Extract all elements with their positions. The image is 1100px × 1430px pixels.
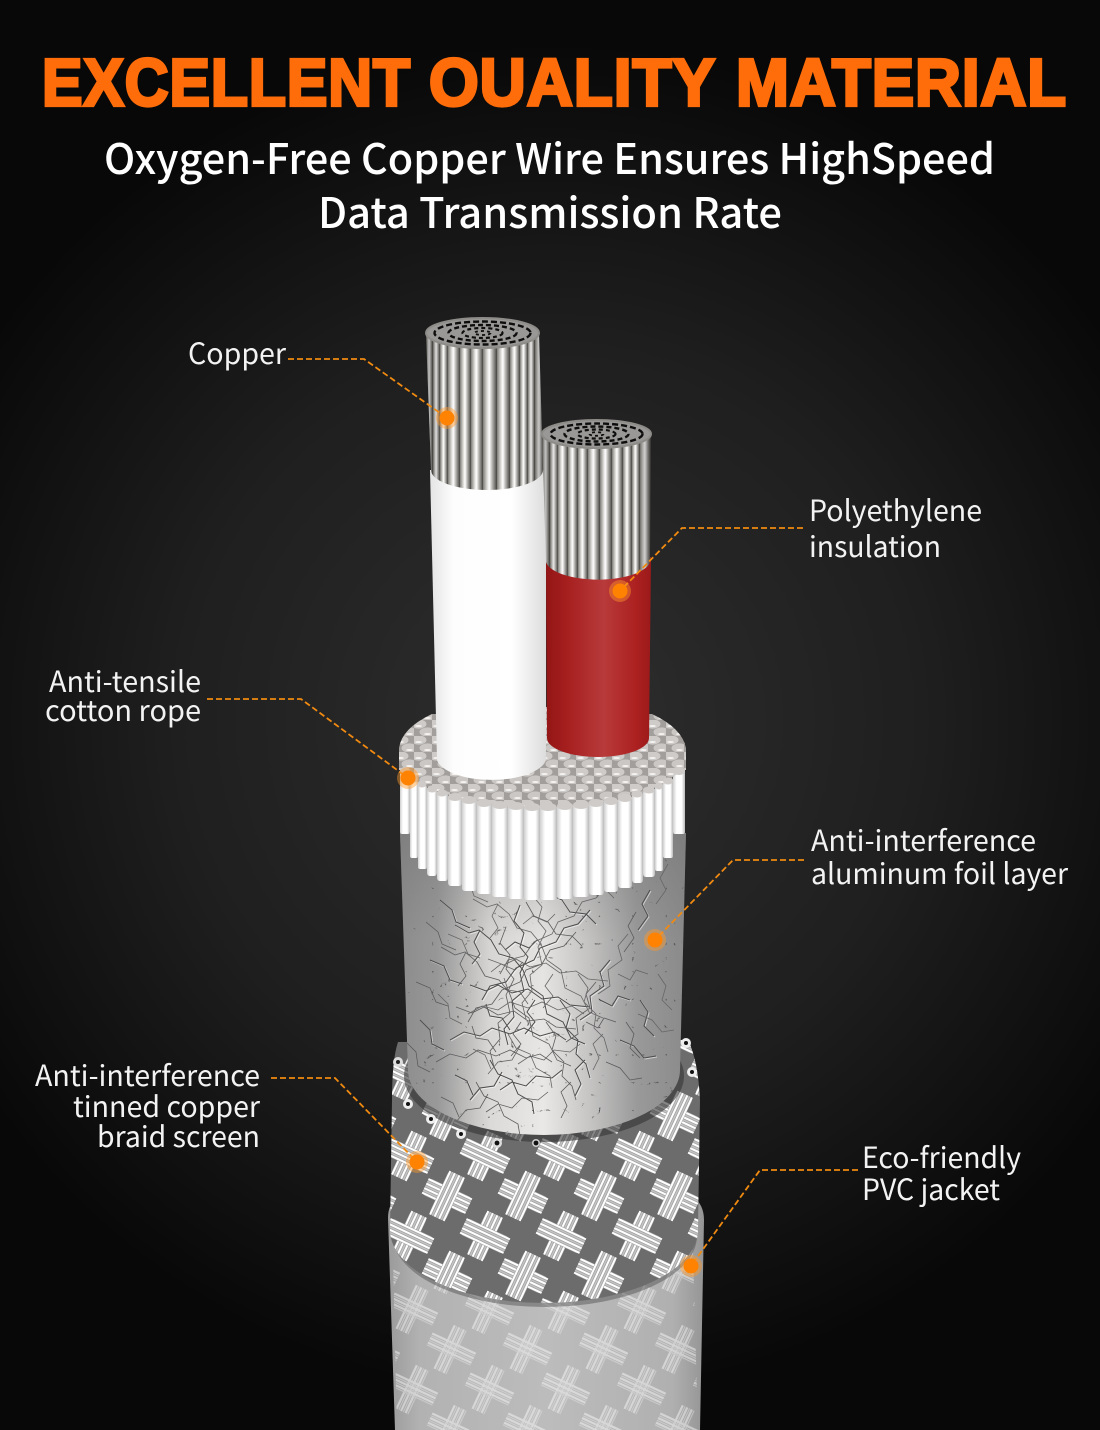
braid screen bbox=[390, 1010, 700, 1303]
cotton rope top surface bbox=[399, 707, 686, 811]
copper end face A bbox=[426, 318, 539, 348]
label: tinned copper braid screen: braid screen bbox=[97, 1114, 260, 1156]
label: aluminum foil layer: Anti-interference bbox=[811, 818, 1036, 860]
label: aluminum foil layer bbox=[644, 818, 1069, 951]
aluminum foil layer bbox=[396, 830, 690, 1140]
label: PVC jacket bbox=[680, 1135, 1021, 1277]
label: tinned copper braid screen: Anti-interference bbox=[35, 1053, 260, 1095]
label: anti-tensile cotton rope: Anti-tensile bbox=[49, 659, 201, 701]
subtitle bbox=[104, 126, 995, 241]
label: copper: Copper bbox=[188, 331, 287, 373]
label: polyethylene insulation: insulation bbox=[809, 524, 941, 566]
label: polyethylene insulation bbox=[609, 488, 982, 602]
copper strands B bbox=[542, 437, 651, 580]
label: PVC jacket: PVC jacket bbox=[862, 1167, 1000, 1209]
label: tinned copper braid screen bbox=[35, 1053, 428, 1173]
PVC jacket bbox=[388, 1165, 704, 1430]
white insulated conductor bbox=[430, 470, 546, 780]
subtitle: Data Transmission Rate bbox=[318, 180, 782, 241]
label: anti-tensile cotton rope bbox=[45, 659, 419, 789]
label: copper bbox=[188, 331, 458, 429]
braid holes bbox=[393, 1038, 697, 1148]
red insulated conductor bbox=[546, 557, 651, 757]
cable illustration bbox=[388, 318, 704, 1430]
title bbox=[42, 46, 1067, 120]
label: anti-tensile cotton rope: cotton rope bbox=[45, 688, 201, 730]
label: PVC jacket: Eco-friendly bbox=[862, 1135, 1021, 1177]
cotton rope rods bbox=[400, 768, 685, 900]
title: EXCELLENT bbox=[42, 46, 411, 120]
label: tinned copper braid screen: tinned copper bbox=[73, 1084, 261, 1126]
label: polyethylene insulation: Polyethylene bbox=[809, 488, 982, 530]
subtitle: Oxygen-Free Copper Wire Ensures HighSpeed bbox=[104, 126, 995, 187]
label: aluminum foil layer: aluminum foil layer bbox=[811, 851, 1069, 893]
title: MATERIAL bbox=[736, 46, 1067, 120]
copper end face B bbox=[542, 420, 651, 448]
copper strands A bbox=[426, 336, 543, 490]
title: OUALITY bbox=[429, 46, 716, 120]
